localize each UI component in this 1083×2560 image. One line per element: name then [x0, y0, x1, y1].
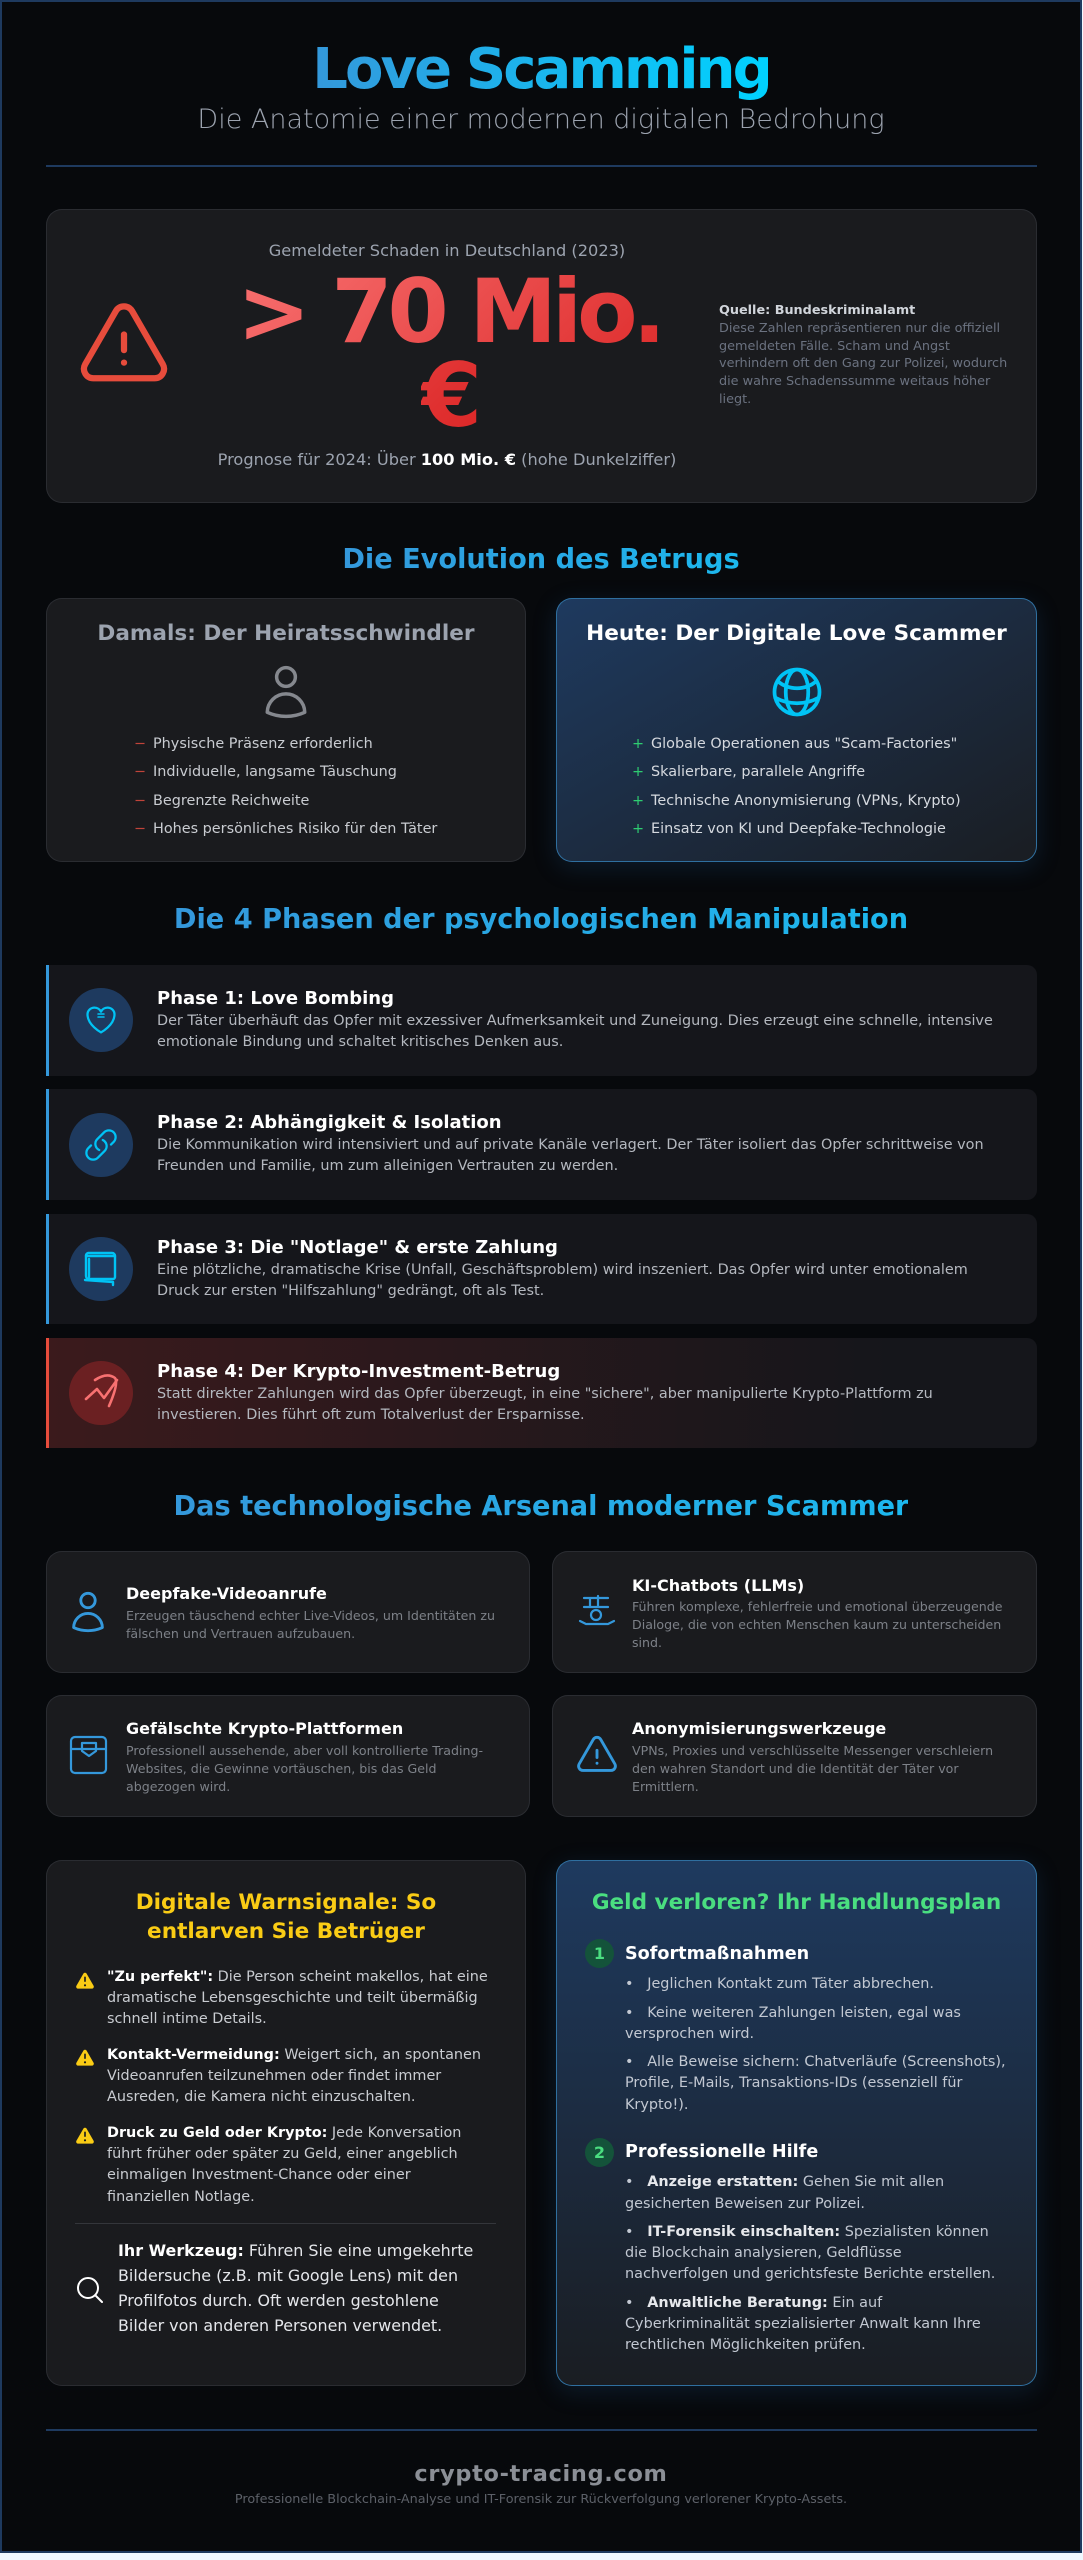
source note	[719, 303, 1007, 407]
tool text: Profilfotos durch. Oft werden gestohlene	[118, 2291, 439, 2310]
icon: magnifier	[77, 2277, 103, 2303]
card text: Erzeugen täuschend echter Live-Videos, um Identitäten zu	[126, 1608, 495, 1623]
tool text: Bilder von anderen Personen verwendet.	[118, 2316, 442, 2335]
heading: evolution: Die Evolution des Betrugs	[342, 544, 740, 575]
list: new traits: +	[632, 736, 644, 752]
step list: nachverfolgen und gerichtsfeste Berichte erstellen.	[625, 2266, 995, 2282]
icon: warning triangle	[80, 303, 168, 382]
card text: Dialoge, die von echten Menschen kaum zu unterscheiden	[632, 1617, 1001, 1632]
panel title	[136, 1890, 436, 1944]
list: old traits: Physische Präsenz erforderlich	[153, 736, 373, 752]
heading: phases: Die 4 Phasen der psychologischen Manipulation	[174, 904, 908, 935]
step list: • IT-Forensik einschalten: Spezialisten können	[625, 2224, 989, 2240]
statistic label: Gemeldeter Schaden in Deutschland (2023)	[269, 241, 625, 260]
forecast: Prognose für 2024: Über 100 Mio. € (hohe Dunkelziffer)	[218, 450, 676, 469]
warning text: Kontakt-Vermeidung: Weigert sich, an spontanen	[107, 2047, 481, 2063]
footer	[0, 2429, 1082, 2519]
warning item 1	[76, 1969, 488, 2027]
panel title: Geld verloren? Ihr Handlungsplan	[592, 1890, 1001, 1915]
statistic block	[218, 241, 676, 469]
step list: rechtlichen Möglichkeiten prüfen.	[625, 2337, 866, 2353]
step list: • Alle Beweise sichern: Chatverläufe (Screenshots),	[625, 2054, 1006, 2070]
source note: Quelle: Bundeskriminalamt	[719, 303, 915, 318]
icon: warning triangle	[577, 1736, 617, 1772]
subtitle: Die Anatomie einer modernen digitalen Bedrohung	[197, 104, 885, 135]
phase text	[157, 1013, 993, 1050]
footer brand: crypto-tracing.com	[414, 2461, 668, 2487]
step list: Krypto!).	[625, 2097, 688, 2113]
warning text	[107, 2125, 461, 2205]
phase text: Der Täter überhäuft das Opfer mit exzessiver Aufmerksamkeit und Zuneigung. Dies erzeugt eine schnelle, intensive	[157, 1013, 993, 1029]
phase text	[157, 1386, 933, 1423]
panel: deepfake	[46, 1551, 530, 1673]
warning text: "Zu perfekt": Die Person scheint makellos, hat eine	[107, 1969, 488, 1985]
icon: heart	[69, 988, 133, 1052]
phase text	[157, 1262, 968, 1299]
icon: stacked windows	[69, 1237, 133, 1301]
panel title: Digitale Warnsignale: So	[136, 1890, 436, 1915]
tool text: Bildersuche (z.B. mit Google Lens) mit den	[118, 2266, 458, 2285]
phase title: Phase 1: Love Bombing	[157, 988, 394, 1009]
statistic value	[237, 260, 661, 447]
warning text: Ausreden, die Kamera nicht einzuschalten.	[107, 2089, 415, 2105]
phase text: Statt direkter Zahlungen wird das Opfer überzeugt, in eine "sichere", aber manipulierte Krypto-Plattform zu	[157, 1386, 933, 1402]
panel: phase 2	[46, 1089, 1037, 1200]
phase title: Phase 4: Der Krypto-Investment-Betrug	[157, 1361, 560, 1382]
tool text	[118, 2241, 473, 2335]
list: old traits: Begrenzte Reichweite	[153, 793, 309, 809]
warning text: einmaligen Investment-Chance oder einer	[107, 2167, 411, 2183]
phase text: Die Kommunikation wird intensiviert und auf private Kanäle verlagert. Der Täter isoliert das Opfer schrittweise von	[157, 1137, 984, 1153]
statistic value: > 70 Mio.	[237, 260, 661, 363]
step number: 2	[594, 2143, 605, 2162]
phase text	[157, 1137, 984, 1174]
source note: gemeldeten Fälle. Scham und Angst	[719, 339, 950, 354]
phase text: Eine plötzliche, dramatische Krise (Unfall, Geschäftsproblem) wird inszeniert. Das Opfer wird unter emotionalem	[157, 1262, 968, 1278]
icon: falling chart	[69, 1361, 133, 1425]
list: new traits: Globale Operationen aus "Scam-Factories"	[651, 736, 957, 752]
footer text: Professionelle Blockchain-Analyse und IT-Forensik zur Rückverfolgung verlorener Krypto-Assets.	[235, 2492, 847, 2507]
warning text: führt früher oder später zu Geld, einer angeblich	[107, 2146, 458, 2162]
step number: 1	[594, 1944, 605, 1963]
header	[46, 37, 1037, 167]
source note: die wahre Schadenssumme weitaus höher	[719, 374, 990, 389]
list: old traits: Hohes persönliches Risiko für den Täter	[153, 821, 437, 837]
card text: Ermittlern.	[632, 1779, 699, 1794]
panel title: Heute: Der Digitale Love Scammer	[586, 621, 1007, 646]
step number	[585, 1939, 614, 1968]
panel: anonymization	[552, 1695, 1037, 1817]
card title: Anonymisierungswerkzeuge	[632, 1719, 886, 1738]
header rule	[46, 165, 1037, 167]
card text: sind.	[632, 1635, 662, 1650]
panel: action plan	[556, 1860, 1037, 2386]
step heading: Professionelle Hilfe	[625, 2142, 818, 2162]
panel: phase 4	[46, 1338, 1037, 1448]
list: new traits: Skalierbare, parallele Angriffe	[651, 764, 865, 780]
card title: KI-Chatbots (LLMs)	[632, 1576, 804, 1595]
warning text: Videoanrufen teilzunehmen oder findet immer	[107, 2068, 441, 2084]
step list	[625, 1974, 1006, 2123]
icon: link	[69, 1113, 133, 1177]
card text: VPNs, Proxies und verschlüsselte Messenger verschleiern	[632, 1743, 993, 1758]
card title: Deepfake-Videoanrufe	[126, 1584, 327, 1603]
panel: chatbots	[552, 1551, 1037, 1673]
phase title: Phase 2: Abhängigkeit & Isolation	[157, 1112, 502, 1133]
panel: phase 1	[46, 965, 1037, 1076]
icon: chest	[70, 1736, 108, 1774]
tool tip	[77, 2241, 473, 2335]
tool text: Ihr Werkzeug: Führen Sie eine umgekehrte	[118, 2241, 473, 2260]
card text: abgezogen wird.	[126, 1779, 230, 1794]
warning text: schnell intime Details.	[107, 2011, 267, 2027]
step list: • Anzeige erstatten: Gehen Sie mit allen	[625, 2174, 944, 2190]
step list	[625, 2172, 995, 2364]
icon: person	[266, 666, 306, 718]
warning text	[107, 2047, 481, 2105]
icon: warning	[76, 2128, 94, 2144]
icon: warning	[76, 2050, 94, 2066]
title: Love Scamming	[312, 37, 770, 102]
step 1	[585, 1939, 1006, 2113]
icon: warning	[76, 1972, 94, 1989]
list: new traits	[632, 736, 961, 837]
list: old traits: −	[134, 736, 146, 752]
step list: Profile, E-Mails, Transaktions-IDs (essenziell für	[625, 2075, 962, 2091]
step heading: Sofortmaßnahmen	[625, 1944, 809, 1964]
phase text: investieren. Dies führt oft zum Totalverlust der Ersparnisse.	[157, 1407, 585, 1423]
card text: Führen komplexe, fehlerfreie und emotional überzeugende	[632, 1599, 1002, 1614]
step list: versprochen wird.	[625, 2026, 754, 2042]
step list: • Keine weiteren Zahlungen leisten, egal was	[625, 2005, 961, 2021]
icon: chatbot	[578, 1594, 616, 1626]
card text	[126, 1608, 495, 1641]
list: new traits: +	[632, 793, 644, 809]
card text: Websites, die Gewinne vortäuschen, bis das Geld	[126, 1761, 437, 1776]
step list: • Jeglichen Kontakt zum Täter abbrechen.	[625, 1976, 934, 1992]
warning text	[107, 1969, 488, 2027]
source note: liegt.	[719, 392, 751, 407]
panel title: Damals: Der Heiratsschwindler	[97, 621, 475, 646]
list: old traits: −	[134, 764, 146, 780]
list: old traits: −	[134, 821, 146, 837]
card text	[632, 1743, 993, 1794]
list: new traits: +	[632, 821, 644, 837]
phase text: emotionale Bindung und schaltet kritisches Denken aus.	[157, 1034, 563, 1050]
source note: Diese Zahlen repräsentieren nur die offiziell	[719, 321, 1000, 336]
card text: den wahren Standort und die Identität der Täter vor	[632, 1761, 959, 1776]
panel: warning signs	[46, 1860, 526, 2386]
phase text: Freunden und Familie, um zum alleinigen Vertrauten zu werden.	[157, 1158, 618, 1174]
step list: die Blockchain analysieren, Geldflüsse	[625, 2245, 902, 2261]
panel: phase 3	[46, 1214, 1037, 1324]
warning text: dramatische Lebensgeschichte und teilt übermäßig	[107, 1990, 478, 2006]
warning text: finanziellen Notlage.	[107, 2189, 255, 2205]
panel: damage statistic	[46, 209, 1037, 503]
card title: Gefälschte Krypto-Plattformen	[126, 1719, 403, 1738]
panel: heute	[556, 598, 1037, 862]
list: new traits: +	[632, 764, 644, 780]
step list: gesicherten Beweisen zur Polizei.	[625, 2196, 865, 2212]
list: new traits: Technische Anonymisierung (VPNs, Krypto)	[651, 793, 961, 809]
phase text: Druck zur ersten "Hilfszahlung" gedrängt, oft als Test.	[157, 1283, 544, 1299]
card text: fälschen und Vertrauen aufzubauen.	[126, 1626, 355, 1641]
source note: verhindern oft den Gang zur Polizei, wodurch	[719, 356, 1007, 371]
warning item 2	[76, 2047, 481, 2105]
step number	[585, 2138, 614, 2167]
panel title: entlarven Sie Betrüger	[147, 1919, 425, 1944]
statistic value: €	[421, 344, 477, 447]
card text	[126, 1743, 483, 1794]
warning text: Druck zu Geld oder Krypto: Jede Konversation	[107, 2125, 461, 2141]
warning item 3	[76, 2125, 461, 2205]
list: old traits	[134, 736, 438, 837]
step list: Cyberkriminalität spezialisierter Anwalt kann Ihre	[625, 2316, 981, 2332]
panel: damals	[46, 598, 526, 862]
icon: globe	[772, 668, 822, 716]
phase title: Phase 3: Die "Notlage" & erste Zahlung	[157, 1237, 558, 1258]
step list: • Anwaltliche Beratung: Ein auf	[625, 2295, 882, 2311]
list: old traits: Individuelle, langsame Täuschung	[153, 764, 397, 780]
card text	[632, 1599, 1002, 1650]
heading: arsenal: Das technologische Arsenal moderner Scammer	[174, 1491, 908, 1522]
icon: person	[72, 1592, 104, 1632]
list: old traits: −	[134, 793, 146, 809]
step 2	[556, 2138, 1037, 2363]
list: new traits: Einsatz von KI und Deepfake-Technologie	[651, 821, 946, 837]
card text: Professionell aussehende, aber voll kontrollierte Trading-	[126, 1743, 483, 1758]
panel: fake platforms	[46, 1695, 530, 1817]
